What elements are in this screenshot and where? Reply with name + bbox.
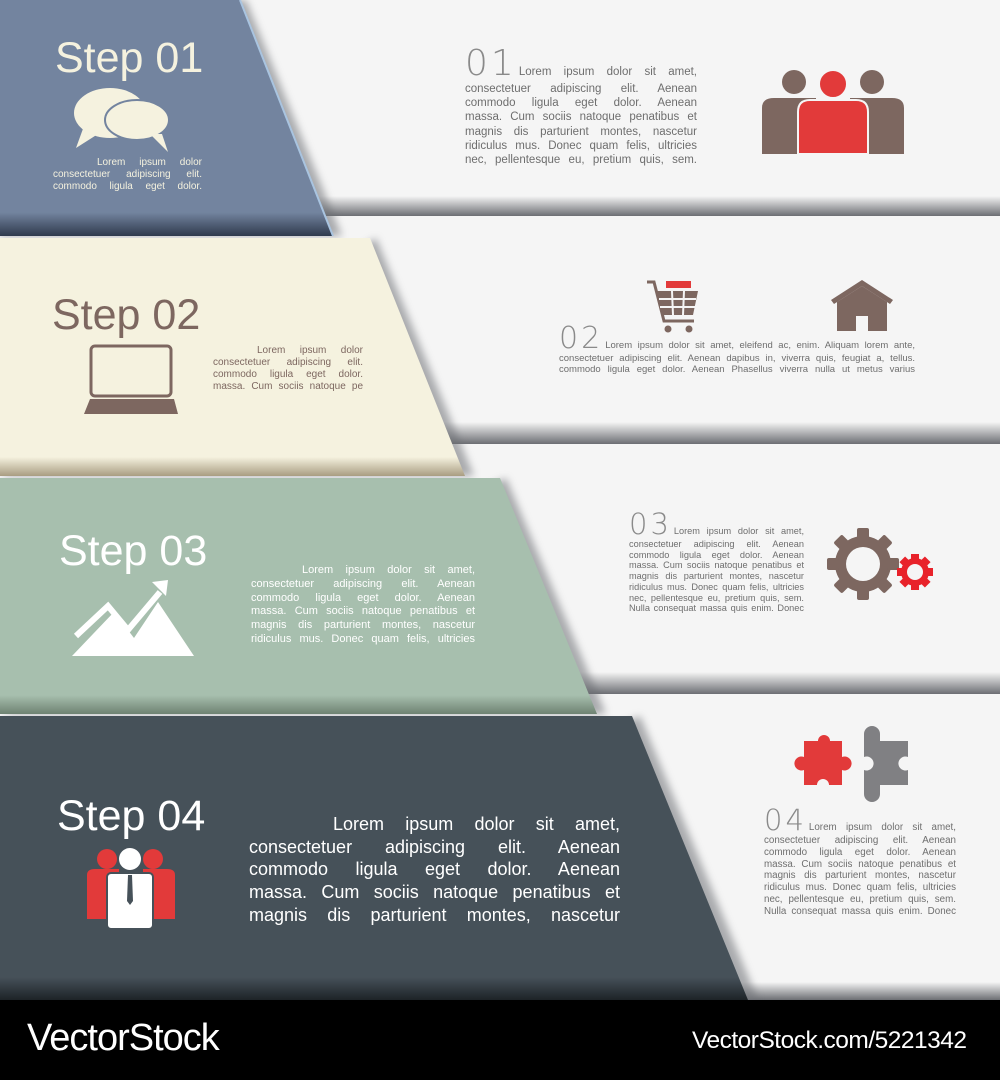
text block: 01: consectetuer adipiscing elit. Aenean — [465, 83, 697, 95]
text block: commodo ligula eget dolor. — [213, 369, 363, 380]
text block: consectetuer adipiscing elit. Aenean — [251, 578, 475, 590]
icon: laptop — [84, 344, 178, 414]
text block: massa. Cum sociis natoque pe — [213, 381, 363, 392]
text block: 04: magnis dis parturient montes, nascetur — [764, 870, 956, 881]
text block — [249, 814, 620, 925]
panel: step 04 — [57, 792, 620, 928]
heading: step 01: Step 01 — [55, 34, 203, 82]
text block: ridiculus mus. Donec quam felis, ultricies — [251, 633, 475, 645]
text block: 04: 04 — [764, 803, 807, 837]
text block: Lorem ipsum dolor sit amet, — [333, 814, 620, 834]
icon: gears — [827, 528, 933, 600]
text block: Lorem ipsum dolor — [257, 345, 363, 356]
text block: massa. Cum sociis natoque penatibus et — [251, 605, 475, 617]
text block: 01: ridiculus mus. Donec quam felis, ultricies — [465, 140, 697, 152]
text block: 01: Lorem ipsum dolor sit amet, — [519, 66, 697, 78]
text block: 03: 03 — [629, 507, 672, 541]
text block: magnis dis parturient montes, nascetur — [251, 619, 475, 631]
text block: 01: 01 — [465, 43, 517, 84]
text block: 04: Lorem ipsum dolor sit amet, — [809, 822, 956, 833]
icon: shopping cart — [647, 280, 698, 332]
text block: 01: magnis dis parturient montes, nascetur — [465, 126, 697, 138]
text block: 01 — [465, 43, 697, 166]
text block: 01: nec, pellentesque eu, pretium quis, sem. — [465, 154, 697, 166]
text block: 01: massa. Cum sociis natoque penatibus et — [465, 111, 697, 123]
icon: team — [87, 848, 175, 928]
panel: step 02 — [52, 291, 363, 414]
text block: 03: ridiculus mus. Donec quam felis, ultricies — [629, 582, 804, 592]
text block: commodo ligula eget dolor. Aenean — [249, 859, 620, 879]
panel: step 01 — [53, 34, 203, 192]
text block: 04: ridiculus mus. Donec quam felis, ultricies — [764, 882, 956, 893]
text block: 04: consectetuer adipiscing elit. Aenean — [764, 835, 956, 846]
icon: house — [831, 280, 893, 331]
text block: 03: commodo ligula eget dolor. Aenean — [629, 550, 804, 560]
text block: commodo ligula eget dolor. — [53, 181, 202, 192]
text block: Lorem ipsum dolor sit amet, — [302, 564, 475, 576]
text block: 01: commodo ligula eget dolor. Aenean — [465, 97, 697, 109]
text block: 02: consectetuer adipiscing elit. Aenean dapibus in, viverra quis, feugiat a, tellus. — [559, 353, 915, 364]
text block: consectetuer adipiscing elit. — [53, 169, 202, 180]
text block: 03: consectetuer adipiscing elit. Aenean — [629, 539, 804, 549]
text block — [251, 564, 475, 645]
text block: 03: massa. Cum sociis natoque penatibus et — [629, 560, 804, 570]
text block: 03: Lorem ipsum dolor sit amet, — [674, 526, 804, 536]
text block: 04: commodo ligula eget dolor. Aenean — [764, 847, 956, 858]
text block: 04: nec, pellentesque eu, pretium quis, sem. — [764, 894, 956, 905]
footer: brand: VectorStock — [27, 1017, 219, 1059]
text block: 03: magnis dis parturient montes, nascetur — [629, 571, 804, 581]
text block: 03: Nulla consequat massa quis enim. Donec — [629, 603, 804, 613]
footer: url: VectorStock.com/5221342 — [692, 1027, 967, 1054]
text block — [213, 345, 363, 392]
text block: Lorem ipsum dolor — [97, 157, 202, 168]
text block: commodo ligula eget dolor. Aenean — [251, 592, 475, 604]
text block: massa. Cum sociis natoque penatibus et — [249, 882, 620, 902]
text block: 03 — [629, 507, 804, 613]
icon: speech bubbles — [74, 88, 168, 152]
text block: consectetuer adipiscing elit. Aenean — [249, 837, 620, 857]
text block: 02: 02 — [559, 321, 603, 356]
text block: 02: commodo ligula eget dolor. Aenean Phasellus viverra nulla ut metus varius — [559, 364, 915, 375]
heading: step 02: Step 02 — [52, 291, 200, 339]
text block: 04: massa. Cum sociis natoque penatibus et — [764, 859, 956, 870]
text block: 04 — [764, 803, 956, 917]
text block: 02 — [559, 321, 915, 375]
heading: step 04: Step 04 — [57, 792, 205, 840]
heading: step 03: Step 03 — [59, 527, 207, 575]
text block: 03: nec, pellentesque eu, pretium quis, sem. — [629, 593, 804, 603]
panel: step 03 — [59, 527, 475, 656]
text block — [53, 157, 202, 192]
text block: 02: Lorem ipsum dolor sit amet, eleifend ac, enim. Aliquam lorem ante, — [605, 340, 915, 351]
text block: 04: Nulla consequat massa quis enim. Donec — [764, 906, 956, 917]
text block: magnis dis parturient montes, nascetur — [249, 905, 620, 925]
icon: growth chart — [72, 580, 194, 656]
icon: people group — [762, 70, 904, 154]
text block: consectetuer adipiscing elit. — [213, 357, 363, 368]
icon: puzzle — [794, 726, 908, 802]
